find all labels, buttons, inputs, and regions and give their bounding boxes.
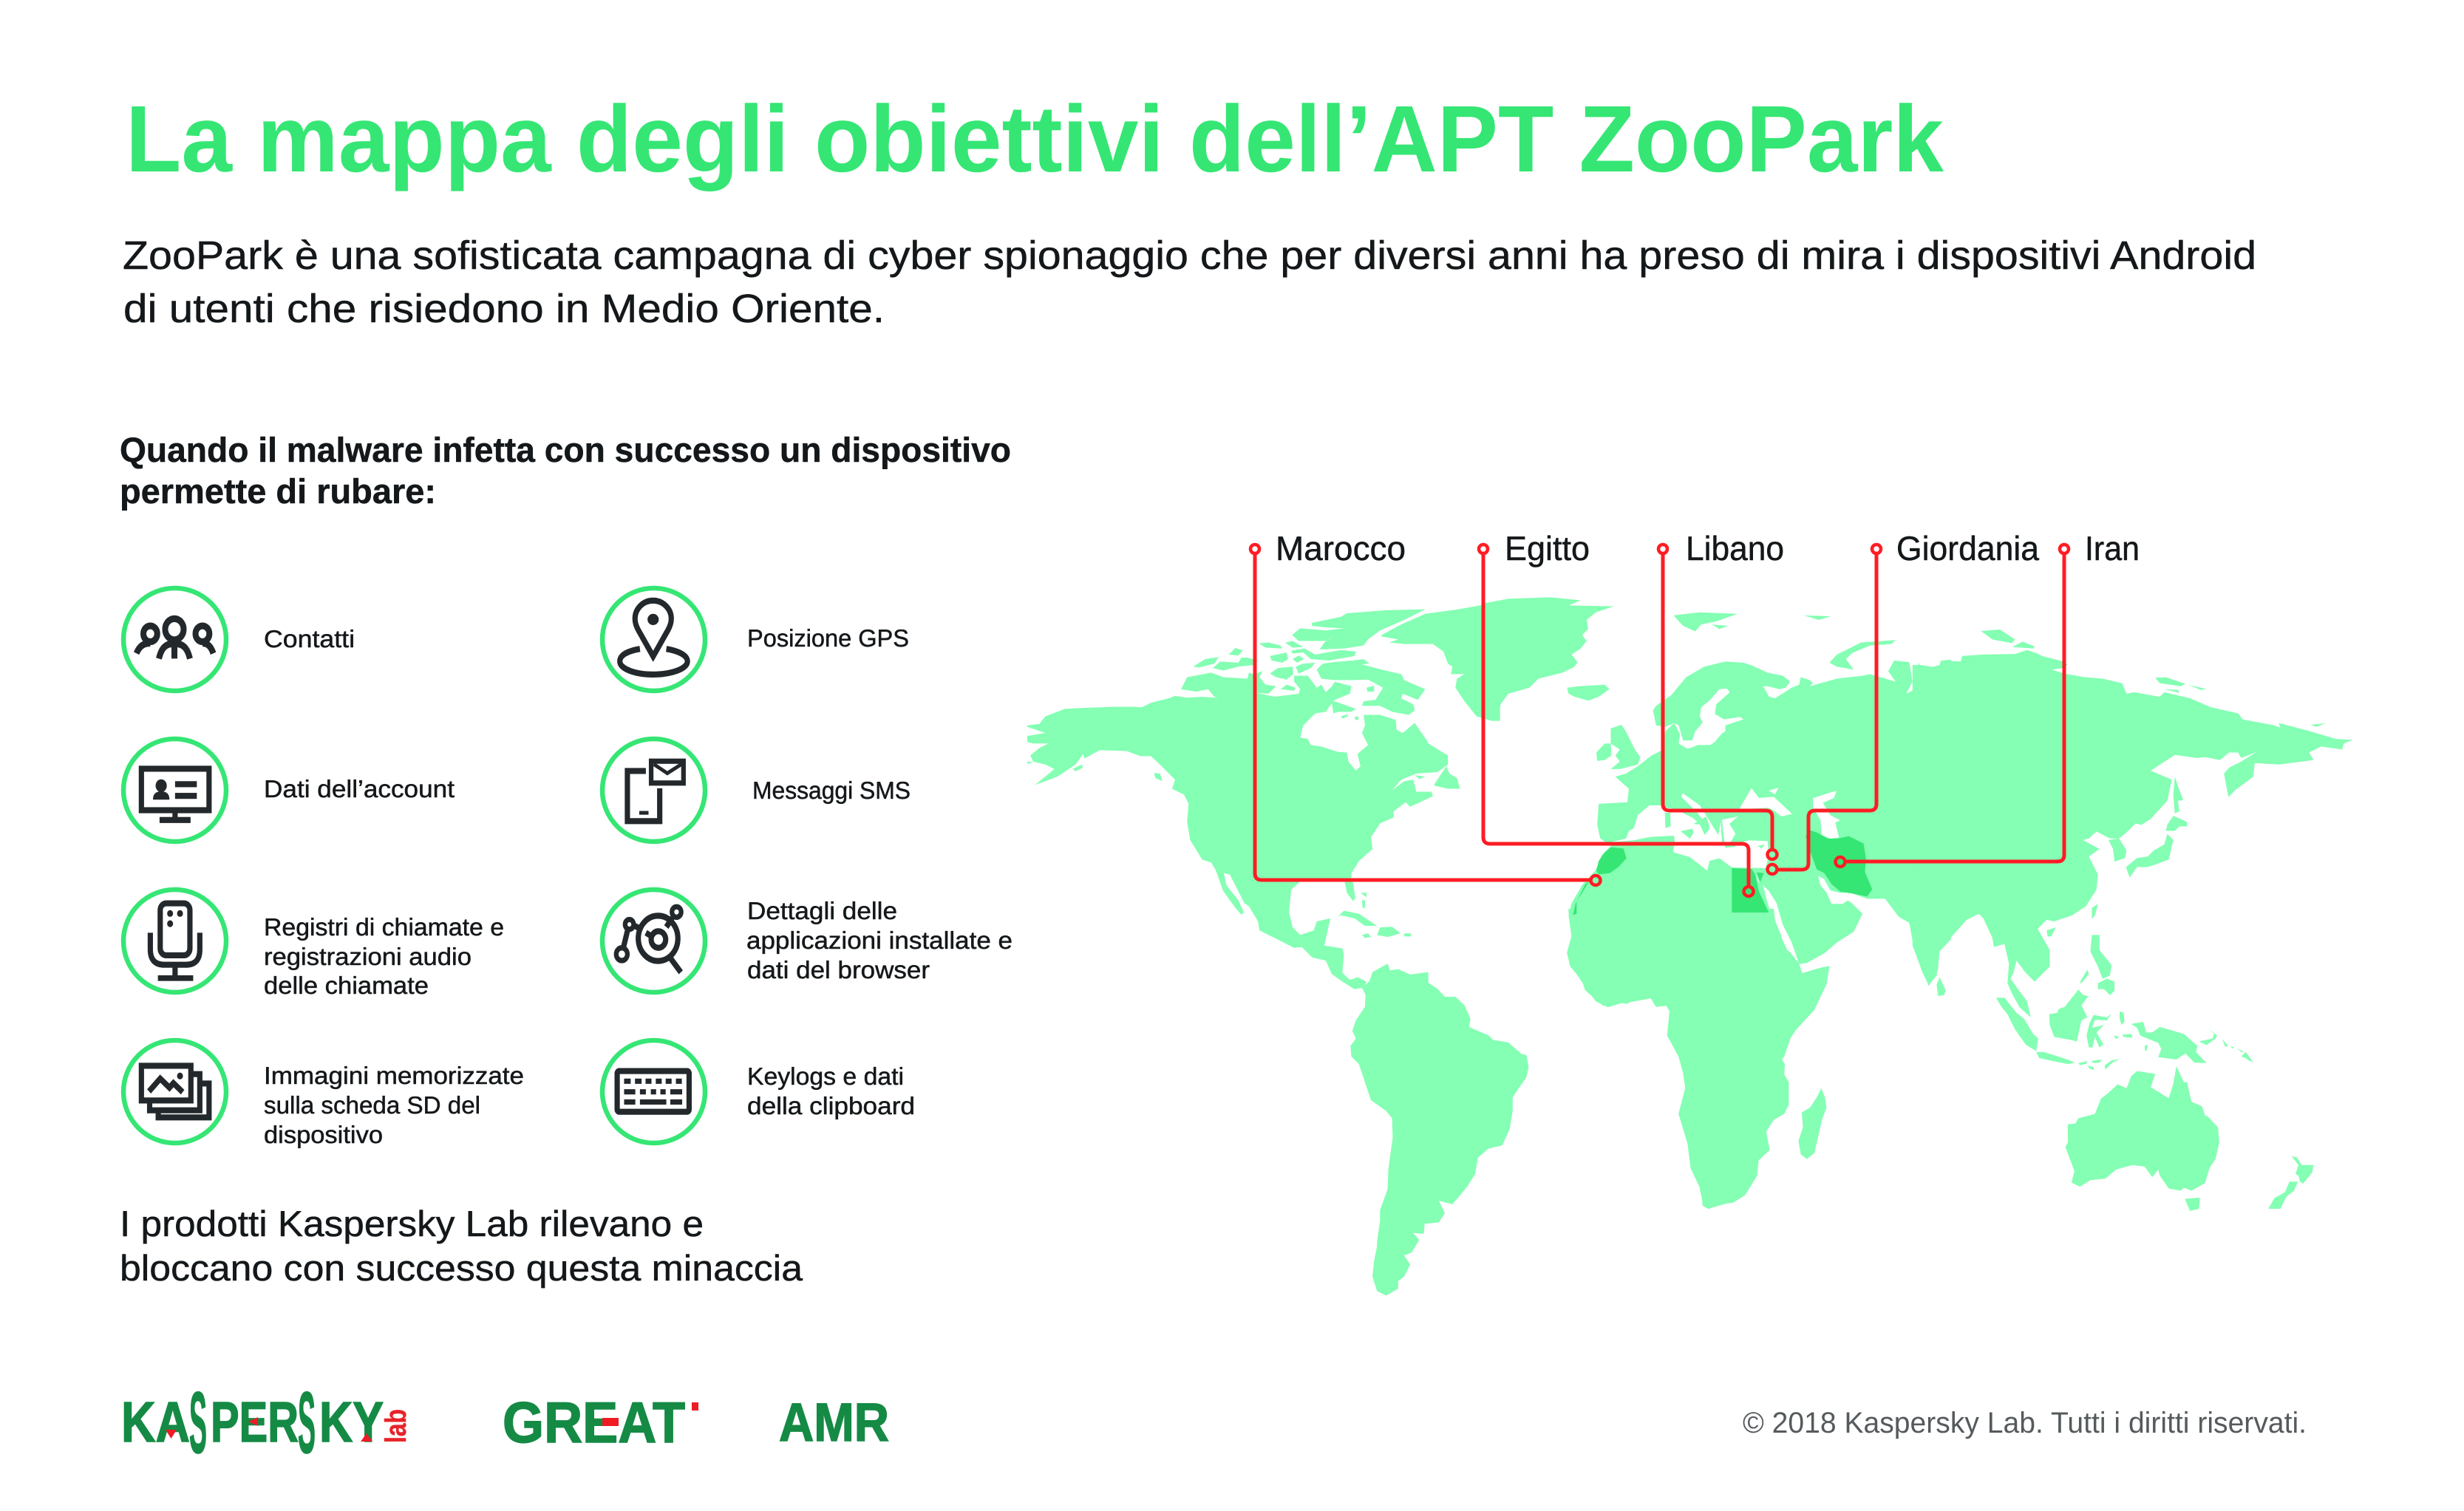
- item: immagini: dispositivo: [264, 1121, 383, 1148]
- item: dettagli applicazioni: dati del browser: [747, 956, 930, 983]
- item: registri chiamate: [123, 890, 504, 999]
- item: dati dell'account: [123, 739, 455, 842]
- item: contatti: [123, 588, 355, 691]
- connector: Egitto: [1479, 529, 1753, 896]
- subheading: [120, 430, 1011, 511]
- item: registri chiamate: delle chiamate: [264, 972, 429, 999]
- item: immagini: Immagini memorizzate: [264, 1062, 524, 1089]
- logo: Kaspersky Lab: S: [298, 1374, 316, 1472]
- connector: Marocco: [1250, 529, 1601, 885]
- logo: Kaspersky Lab: KY: [319, 1391, 384, 1454]
- item: immagini: [123, 1040, 524, 1148]
- connector: Giordania: [1768, 529, 2039, 874]
- item: posizione GPS: [602, 588, 909, 691]
- title: La mappa degli obiettivi dell’APT ZooPark: [126, 86, 1944, 192]
- map: highlighted target countries: [1573, 830, 1872, 915]
- map: mediterranean islands: [1665, 813, 1765, 848]
- connector: Libano: Libano: [1686, 529, 1784, 567]
- item: dati dell'account: Dati dell’account: [264, 775, 455, 802]
- map: North America and Greenland west: [1027, 601, 1500, 989]
- country: Egypt: [1732, 868, 1769, 913]
- map: Europe, Middle East, north Africa: [1478, 597, 1951, 1057]
- closing statement: I prodotti Kaspersky Lab rilevano e: [120, 1204, 704, 1244]
- item: registri chiamate: registrazioni audio: [264, 943, 472, 970]
- intro text: ZooPark è una sofisticata campagna di cyber spionaggio che per diversi anni ha preso di mira i dispositivi Android: [123, 233, 2256, 278]
- closing statement: bloccano con successo questa minaccia: [120, 1249, 803, 1289]
- world map: [1027, 529, 2352, 1295]
- item: dettagli applicazioni: [602, 890, 1013, 992]
- item: dettagli applicazioni: Dettagli delle: [747, 897, 897, 924]
- connector: Egitto: Egitto: [1505, 529, 1590, 567]
- subheading: Quando il malware infetta con successo un dispositivo: [120, 430, 1011, 469]
- subheading: permette di rubare:: [120, 471, 436, 511]
- logo: GReAT: GREAT: [503, 1390, 685, 1455]
- connector: Marocco: Marocco: [1276, 529, 1406, 567]
- logo: Kaspersky Lab: S: [189, 1374, 207, 1472]
- item: keylogs: della clipboard: [747, 1092, 915, 1119]
- connector: Iran: Iran: [2085, 529, 2140, 567]
- connector: Libano: [1658, 529, 1784, 859]
- item: messaggi SMS: [602, 739, 911, 842]
- country: Morocco: [1573, 847, 1627, 915]
- item: contatti: Contatti: [264, 625, 355, 652]
- logo: Kaspersky Lab: lab: [380, 1409, 412, 1443]
- map: South-East Asia and Oceania: [1996, 989, 2313, 1211]
- logo: Kaspersky Lab: KA: [121, 1391, 190, 1454]
- item: messaggi SMS: Messaggi SMS: [752, 777, 911, 804]
- logo: Kaspersky Lab: PER: [211, 1391, 299, 1454]
- item: registri chiamate: Registri di chiamate e: [264, 913, 504, 941]
- logo: Kaspersky Lab: [121, 1374, 412, 1472]
- logo: AMR: AMR: [779, 1393, 889, 1453]
- panel: stolen data list, left column: [123, 588, 524, 1148]
- intro text: di utenti che risiedono in Medio Oriente.: [123, 287, 885, 331]
- country: Iran: [1806, 830, 1872, 896]
- panel: stolen data list, right column: [602, 588, 1013, 1143]
- item: immagini: sulla scheda SD del: [264, 1091, 480, 1119]
- connector: Iran: [1836, 529, 2140, 867]
- connector: Giordania: Giordania: [1896, 529, 2039, 567]
- map: South America and central Africa: [1350, 909, 1729, 1295]
- item: posizione GPS: Posizione GPS: [747, 624, 909, 652]
- item: keylogs: [602, 1040, 915, 1143]
- copyright: © 2018 Kaspersky Lab. Tutti i diritti riservati.: [1743, 1407, 2307, 1439]
- map: east Africa and Madagascar: [1700, 909, 1829, 1209]
- map: seas cut out of the land: [1610, 689, 1850, 964]
- intro text: [123, 233, 2256, 331]
- closing statement: [120, 1204, 803, 1289]
- item: keylogs: Keylogs e dati: [747, 1063, 904, 1090]
- item: dettagli applicazioni: applicazioni installate e: [746, 927, 1013, 954]
- map: Asia: [1913, 630, 2352, 1017]
